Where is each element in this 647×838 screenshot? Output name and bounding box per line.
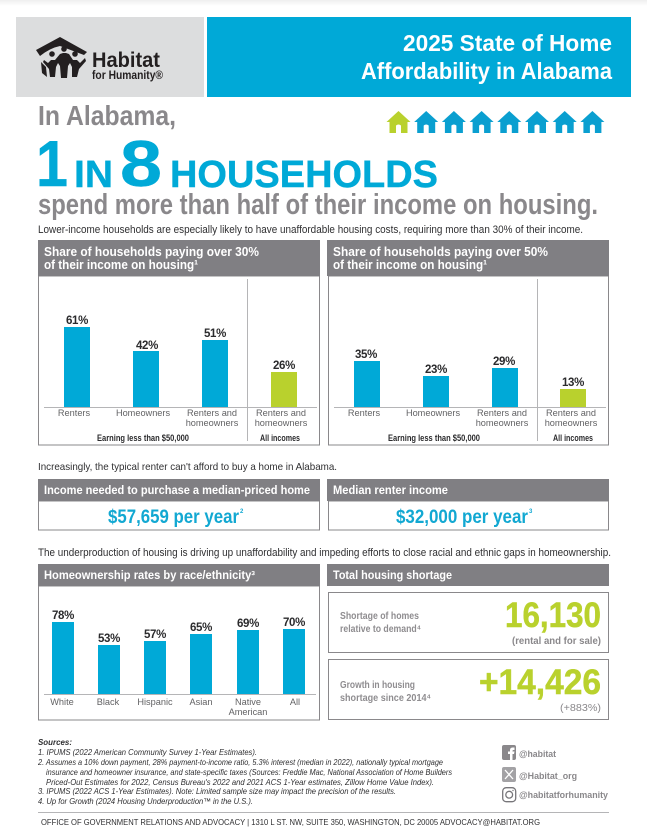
- sources: Priced-Out Estimates for 2022, Census Bureau's 2022 and 2021 ACS 1-Year estimates, Zillow Home Value Index).: [46, 778, 434, 787]
- panel: homeownership rates: Homeownership rates by race/ethnicity³: [44, 569, 255, 582]
- bar chart: over 30%: 51%: [204, 328, 226, 340]
- sources: 4. Up for Growth (2024 Housing Underproduction™ in the U.S.).: [38, 797, 253, 806]
- bar chart: over 30%: All incomes: [260, 433, 300, 443]
- bar chart: over 30%: 61%: [66, 315, 88, 327]
- bar chart: homeownership: 69%: [237, 618, 259, 630]
- stat: growth in shortage: +14,426: [479, 663, 601, 702]
- bar chart: homeownership: 70%: [283, 617, 305, 629]
- bar chart: homeownership: All: [290, 697, 300, 707]
- header: title banner: Affordability in Alabama: [361, 58, 612, 84]
- bar chart: over 50%: Renters: [348, 408, 380, 418]
- logo wordmark: Habitat: [92, 49, 160, 72]
- bar chart: over 30%: Renters and: [256, 408, 306, 418]
- bar chart: over 50%: 13%: [562, 377, 584, 389]
- bar chart: over 30%: Earning less than $50,000: [97, 433, 189, 443]
- bar chart: over 50%: 23%: [425, 364, 447, 376]
- headline: 1 in 8 households: 8: [120, 127, 162, 200]
- social: X: @Habitat_org: [519, 770, 577, 781]
- bar chart: homeownership: American: [229, 707, 267, 717]
- bar chart: over 30%: Renters and: [187, 408, 237, 418]
- social: instagram: @habitatforhumanity: [519, 789, 609, 800]
- panel: median renter income: $32,000 per year: [396, 506, 528, 528]
- bar chart: homeownership: Hispanic: [137, 697, 173, 707]
- panel: share paying over 30%: of their income on housing¹: [44, 258, 198, 272]
- stat: shortage of homes: relative to demand⁴: [340, 624, 421, 635]
- bar chart: homeownership: Asian: [190, 697, 212, 707]
- social: facebook: @habitat: [519, 748, 556, 759]
- panel: income needed: $57,659 per year: [108, 506, 239, 528]
- bar chart: over 50%: Renters and: [477, 408, 527, 418]
- headline: 1 in 8 households: IN: [74, 154, 113, 196]
- logo wordmark: for Humanity®: [92, 70, 163, 82]
- panel: median renter income: Median renter income: [333, 484, 449, 497]
- panel: total housing shortage: Total housing shortage: [333, 569, 453, 582]
- stat: growth in shortage: [328, 660, 608, 720]
- bar chart: over 50%: homeowners: [476, 418, 529, 428]
- intro text: Lower-income households are especially likely to have unaffordable housing costs, requiring more than 30% of their income.: [38, 224, 583, 236]
- bar chart: over 30%: 42%: [136, 340, 158, 352]
- bar chart: over 50%: Homeowners: [406, 408, 460, 418]
- headline: 1 in 8 households: HOUSEHOLDS: [170, 154, 438, 196]
- panel: income needed: Income needed to purchase a median-priced home: [44, 484, 311, 497]
- text: underproduction: The underproduction of housing is driving up unaffordability and impeding efforts to close racial and ethnic gaps in homeownership.: [38, 547, 611, 559]
- headline: 1 in 8 households: [36, 127, 438, 200]
- sources: insurance and homeowner insurance, and state-specific taxes (Sources: Freddie Mac, National Association of Home Builders: [46, 768, 452, 777]
- bar chart: homeownership: 57%: [144, 629, 166, 641]
- bar chart: homeownership: White: [50, 697, 74, 707]
- panel: total housing shortage: [327, 564, 609, 720]
- social: X: [502, 767, 577, 782]
- icon: Habitat logo house and people: [36, 37, 87, 78]
- bar chart: over 50%: Earning less than $50,000: [388, 433, 480, 443]
- stat: growth in shortage: shortage since 2014⁴: [340, 693, 431, 704]
- stat: shortage of homes: [328, 592, 608, 652]
- headline: 1 in 8 households: 1: [36, 127, 68, 200]
- stat: shortage of homes: Shortage of homes: [340, 611, 419, 622]
- bar chart: homeownership: 65%: [190, 622, 212, 634]
- sources: 3. IPUMS (2022 ACS 1-Year Estimates). Note: Limited sample size may impact the precision of the results.: [38, 787, 396, 796]
- bar chart: over 30%: [58, 315, 308, 443]
- bar chart: over 30%: homeowners: [186, 418, 239, 428]
- panel: homeownership rates: [38, 564, 320, 720]
- sources: Sources:: [38, 738, 72, 747]
- panel: share paying over 50%: [327, 240, 609, 445]
- bar chart: over 50%: Renters and: [546, 408, 596, 418]
- panel: share paying over 30%: Share of households paying over 30%: [44, 245, 259, 259]
- panel: income needed: [38, 479, 320, 530]
- social: instagram: [503, 788, 609, 802]
- bar chart: over 30%: 26%: [273, 360, 295, 372]
- panel: share paying over 50%: Share of households paying over 50%: [333, 245, 548, 259]
- bar chart: homeownership: Black: [97, 697, 120, 707]
- social: facebook: [502, 745, 556, 760]
- stat: shortage of homes: (rental and for sale): [512, 636, 601, 647]
- bar chart: over 50%: All incomes: [553, 433, 593, 443]
- logo wordmark: [92, 49, 163, 82]
- header: title banner: 2025 State of Home: [403, 30, 612, 56]
- bar chart: homeownership: Native: [235, 697, 261, 707]
- bar chart: homeownership: 78%: [52, 610, 74, 622]
- header: title banner: [207, 17, 631, 97]
- stat: growth in shortage: Growth in housing: [340, 680, 415, 691]
- footer: OFFICE OF GOVERNMENT RELATIONS AND ADVOCACY | 1310 L ST. NW, SUITE 350, WASHINGTON, DC 20005 ADVOCACY@HABITAT.ORG: [41, 817, 540, 827]
- panel: share paying over 50%: of their income on housing¹: [333, 258, 487, 272]
- bar chart: over 50%: homeowners: [545, 418, 598, 428]
- sources: [37, 738, 452, 806]
- bar chart: over 30%: Renters: [58, 408, 90, 418]
- header: logo panel: [16, 17, 204, 97]
- bar chart: homeownership: 53%: [98, 633, 120, 645]
- bar chart: over 50%: 29%: [493, 356, 515, 368]
- icon row: 1 in 8 houses: [386, 111, 604, 133]
- text: typical renter: Increasingly, the typical renter can't afford to buy a home in Alabama.: [38, 462, 337, 473]
- bar chart: homeownership: [50, 610, 305, 717]
- stat: shortage of homes: 16,130: [505, 596, 601, 635]
- heading: In Alabama: In Alabama,: [38, 100, 176, 131]
- bar chart: over 30%: Homeowners: [116, 408, 170, 418]
- stat: growth in shortage: (+883%): [560, 703, 601, 714]
- bar chart: over 50%: [348, 349, 598, 443]
- sources: 1. IPUMS (2022 American Community Survey 1-Year Estimates).: [38, 748, 257, 757]
- bar chart: over 30%: homeowners: [255, 418, 308, 428]
- panel: share paying over 30%: [38, 240, 320, 445]
- panel: income needed: 2: [240, 509, 244, 515]
- panel: median renter income: 3: [529, 509, 533, 515]
- bar chart: over 50%: 35%: [355, 349, 377, 361]
- panel: median renter income: [327, 479, 609, 530]
- sources: 2. Assumes a 10% down payment, 28% payment-to-income ratio, 5.3% interest (median in 2022), nationally typical mortgage: [37, 758, 443, 767]
